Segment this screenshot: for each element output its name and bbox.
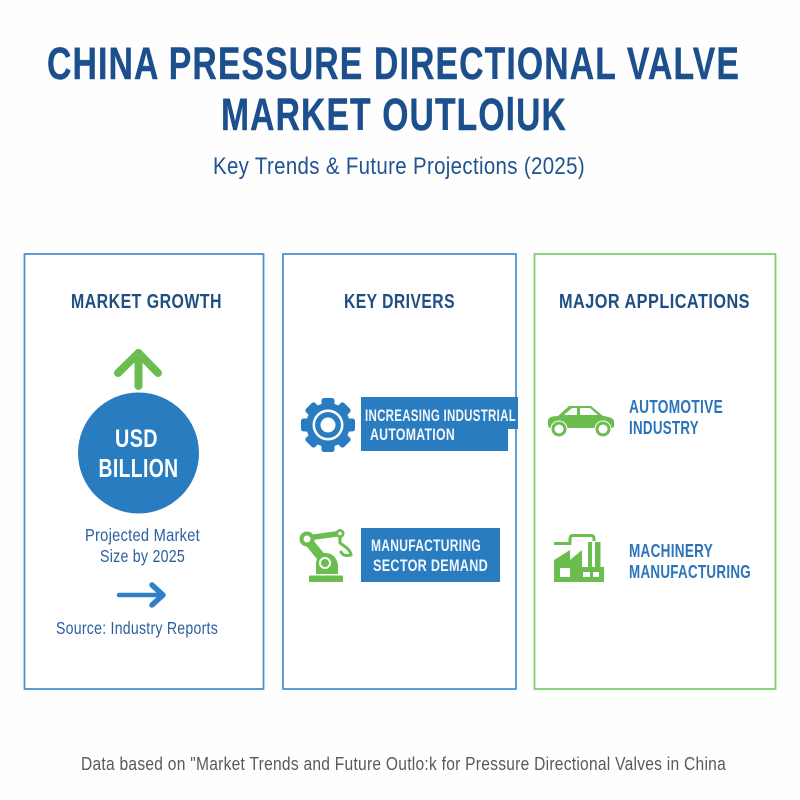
usd billion circle [78,392,199,514]
driver label: manufacturing sector demand: SECTOR DEMAND [373,556,488,575]
usd billion circle: BILLION [98,453,178,483]
panel: market growth [24,254,264,689]
label: machinery manufacturing: MANUFACTURING [629,562,751,582]
title: MARKET OUTLOlUK [221,89,567,140]
icon: blue right arrow [119,585,163,605]
label: machinery manufacturing: MACHINERY [629,541,713,561]
panel: major applications [534,254,776,689]
title [47,38,740,140]
label: machinery manufacturing [629,541,751,582]
label: automotive industry: AUTOMOTIVE [629,397,723,417]
icon: factory [554,536,604,582]
driver label: increasing industrial automation: INCREASING INDUSTRIAL [365,406,516,425]
label: automotive industry: INDUSTRY [629,418,699,438]
projected market size text: Projected Market [85,525,200,545]
icon: robot arm [300,529,351,582]
icon: car [548,406,614,438]
icon: gear [301,398,355,452]
driver label: manufacturing sector demand: MANUFACTURING [371,536,481,555]
heading: major applications: MAJOR APPLICATIONS [559,290,750,313]
panel: key drivers [283,254,518,689]
driver label: manufacturing sector demand [361,528,500,582]
heading: market growth: MARKET GROWTH [71,290,222,313]
projected market size text: Size by 2025 [100,546,185,566]
icon: green up arrow [118,353,158,386]
usd billion circle: USD [115,425,158,453]
projected market size text [85,525,200,566]
heading: key drivers: KEY DRIVERS [344,290,455,313]
label: automotive industry [629,397,723,438]
subtitle: Key Trends & Future Projections (2025) [213,153,585,180]
source text: Source: Industry Reports [56,618,218,638]
driver label: increasing industrial automation [361,397,518,451]
driver label: increasing industrial automation: AUTOMATION [370,425,455,444]
